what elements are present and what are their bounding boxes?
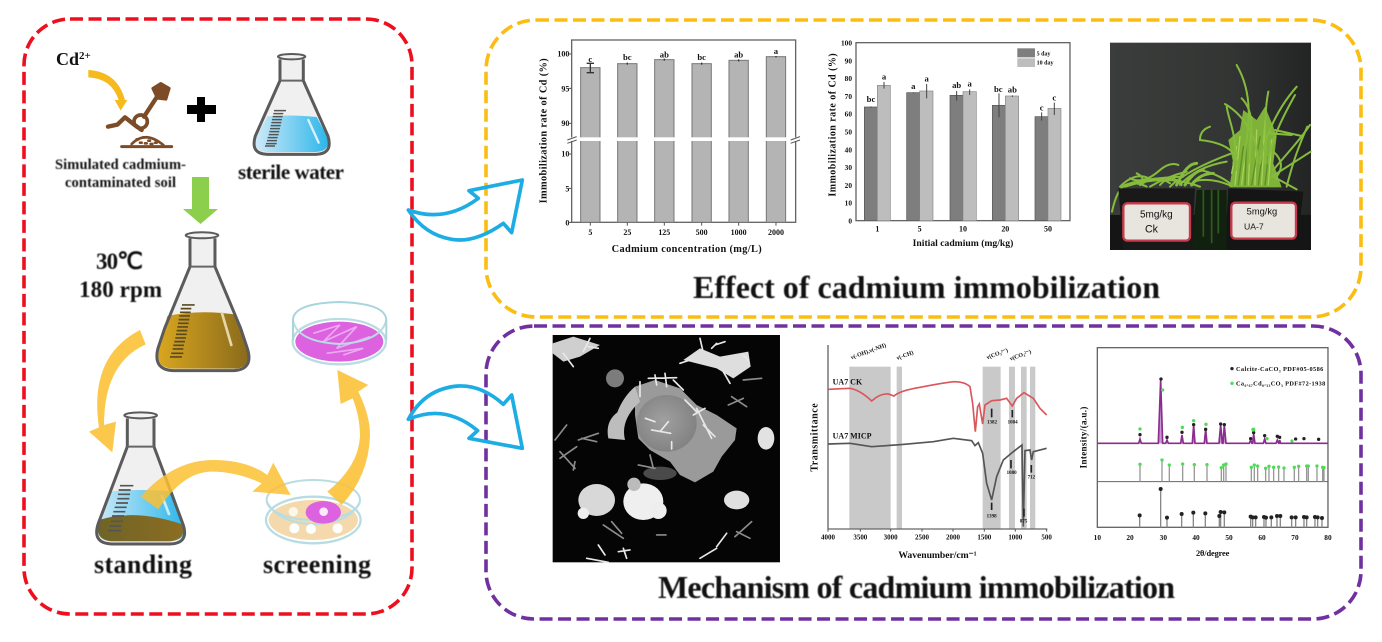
panel: effect of cadmium immobilization (486, 20, 1361, 317)
bar chart: immobilization vs cadmium concentration: 95 (561, 84, 569, 93)
bar chart: immobilization vs initial cadmium: 80 (845, 74, 852, 83)
bar chart: immobilization vs cadmium concentration: 1000 (731, 228, 747, 237)
bar chart: immobilization vs cadmium concentration: a (774, 46, 779, 56)
chart: XRD patterns: 10 (1094, 533, 1101, 542)
bar chart: immobilization vs initial cadmium: 70 (845, 92, 852, 101)
label: Cd2+: 2+ (79, 50, 91, 62)
bar chart: immobilization vs initial cadmium: 90 (845, 56, 852, 65)
photo: wheat seedlings in two pots: UA-7 (1244, 221, 1264, 231)
chart: FTIR spectra: 3500 (853, 533, 868, 541)
icon: culture flask gold (157, 232, 249, 371)
bar chart: immobilization vs initial cadmium: bc (867, 94, 875, 104)
chart: FTIR spectra: 712 (1028, 475, 1036, 480)
chart: XRD patterns: 50 (1225, 533, 1233, 542)
icon: magenta streak dish (293, 302, 386, 364)
icon: plus (187, 97, 216, 122)
bar chart: immobilization vs initial cadmium: bc (994, 84, 1003, 94)
chart: XRD patterns: 30 (1160, 533, 1167, 542)
bar chart: immobilization vs initial cadmium: 5 (918, 225, 922, 234)
bar chart: immobilization vs cadmium concentration: 0 (565, 218, 569, 227)
bar chart: immobilization vs cadmium concentration: 25 (623, 228, 631, 237)
bar chart: immobilization vs initial cadmium: a (967, 79, 972, 89)
chart: XRD patterns: 80 (1324, 533, 1332, 542)
label: screening: screening (263, 550, 371, 579)
label: conditions: 180 rpm (79, 277, 162, 302)
bar chart: immobilization vs cadmium concentration (538, 40, 800, 255)
chart: XRD patterns: 2θ/degree (1196, 549, 1230, 558)
chart: FTIR spectra: 1080 (1007, 471, 1017, 476)
bar chart: immobilization vs initial cadmium: ab (952, 80, 961, 90)
label: Cd2+: Cd (56, 49, 79, 69)
chart: FTIR spectra: ν(CO₃²⁻) (1008, 348, 1032, 363)
chart: FTIR spectra: 2500 (915, 533, 929, 541)
arrow: workflow to mechanism (408, 386, 522, 448)
photo: SEM micrograph (553, 335, 780, 562)
title: mechanism: Mechanism of cadmium immobilization (658, 569, 1175, 605)
bar chart: immobilization vs initial cadmium: 20 (845, 181, 852, 190)
chart: FTIR spectra: Transmittance (809, 403, 820, 472)
arrow: screening to plate (327, 370, 370, 505)
chart: XRD patterns (1078, 348, 1332, 558)
chart: FTIR spectra: 2000 (946, 533, 960, 541)
chart: FTIR spectra: 1398 (987, 514, 997, 519)
icon: screening dish (266, 480, 361, 543)
chart: FTIR spectra: UA7 MICP (833, 431, 872, 440)
bar chart: immobilization vs initial cadmium: ab (1008, 84, 1017, 94)
title: effect: Effect of cadmium immobilization (693, 269, 1160, 305)
label: standing: standing (94, 550, 192, 579)
bar chart: immobilization vs cadmium concentration: ab (660, 49, 669, 59)
icon: green down arrow (183, 177, 218, 224)
bar chart: immobilization vs initial cadmium: 60 (845, 110, 852, 119)
chart: FTIR spectra: 3000 (884, 533, 898, 541)
bar chart: immobilization vs cadmium concentration: bc (697, 52, 706, 62)
chart: FTIR spectra: Wavenumber/cm⁻¹ (898, 550, 977, 561)
chart: XRD patterns: Ca₀.₆₇Cd₀.₃₃CO₃ PDF#72-1938 (1236, 380, 1325, 387)
chart: FTIR spectra: ν(-CH) (895, 349, 915, 362)
bar chart: immobilization vs cadmium concentration: 90 (561, 119, 569, 128)
bar chart: immobilization vs cadmium concentration: 125 (658, 228, 670, 237)
chart: FTIR spectra: 1382 (987, 420, 997, 425)
chart: FTIR spectra: 500 (1041, 533, 1052, 541)
bar chart: immobilization vs initial cadmium: 100 (841, 38, 852, 47)
bar chart: immobilization vs initial cadmium: 50 (1044, 225, 1052, 234)
bar chart: immobilization vs cadmium concentration: Immobilization rate of Cd (%) (538, 58, 549, 203)
chart: XRD patterns: Intensity/(a.u.) (1078, 407, 1088, 468)
arrow: standing to screening (141, 460, 291, 509)
label: sterile water: sterile water (238, 160, 344, 184)
chart: FTIR spectra: 1500 (977, 533, 992, 541)
bar chart: immobilization vs initial cadmium: 10 (845, 199, 852, 208)
arrow: workflow to effect (408, 180, 522, 240)
bar chart: immobilization vs cadmium concentration: 10 (561, 150, 569, 159)
chart: FTIR spectra: UA7 CK (833, 378, 863, 387)
bar chart: immobilization vs initial cadmium: 30 (845, 163, 852, 172)
bar chart: immobilization vs cadmium concentration: 2000 (768, 228, 784, 237)
bar chart: immobilization vs initial cadmium: a (924, 74, 929, 84)
icon: sterile water flask (254, 54, 329, 154)
label: simulated soil: Simulated cadmium- (55, 157, 186, 173)
bar chart: immobilization vs cadmium concentration: c (588, 54, 592, 64)
bar chart: immobilization vs initial cadmium: 10 (959, 225, 967, 234)
bar chart: immobilization vs cadmium concentration: bc (623, 52, 632, 62)
label: conditions (79, 249, 162, 302)
chart: FTIR spectra: 875 (1020, 520, 1028, 525)
icon: soil and shovel (108, 83, 172, 147)
label: simulated soil: contaminated soil (65, 175, 176, 191)
chart: XRD patterns: 20 (1126, 533, 1134, 542)
chart: XRD patterns: 70 (1291, 533, 1299, 542)
bar chart: immobilization vs initial cadmium: 50 (845, 128, 852, 137)
chart: FTIR spectra (809, 342, 1052, 561)
bar chart: immobilization vs cadmium concentration: 5 (588, 228, 592, 237)
bar chart: immobilization vs initial cadmium: Immobilization rate of Cd (%) (827, 53, 838, 197)
chart: XRD patterns: Calcite-CaCO₃ PDF#05-0586 (1236, 366, 1323, 373)
bar chart: immobilization vs initial cadmium: c (1040, 102, 1044, 112)
bar chart: immobilization vs cadmium concentration: ab (734, 49, 743, 59)
icon: yellow curved arrow into soil (88, 70, 127, 111)
bar chart: immobilization vs initial cadmium: 5 day (1037, 51, 1050, 57)
chart: FTIR spectra: 1084 (1008, 420, 1018, 425)
chart: XRD patterns: 40 (1192, 533, 1200, 542)
bar chart: immobilization vs initial cadmium (827, 38, 1070, 249)
bar chart: immobilization vs initial cadmium: c (1052, 92, 1056, 102)
bar chart: immobilization vs cadmium concentration: Cadmium concentration (mg/L) (612, 244, 762, 255)
icon: standing flask (96, 412, 185, 544)
bar chart: immobilization vs initial cadmium: Initial cadmium (mg/kg) (913, 238, 1013, 249)
photo: wheat seedlings in two pots: 5mg/kg (1247, 206, 1277, 216)
label: simulated soil (55, 157, 186, 191)
photo: wheat seedlings in two pots: Ck (1145, 224, 1159, 236)
bar chart: immobilization vs initial cadmium: 20 (1001, 225, 1009, 234)
panel: mechanism of cadmium immobilization (486, 326, 1361, 619)
bar chart: immobilization vs cadmium concentration: 500 (696, 228, 708, 237)
bar chart: immobilization vs initial cadmium: 40 (845, 145, 852, 154)
chart: FTIR spectra: ν(-OH),ν(-NH) (849, 342, 887, 362)
chart: FTIR spectra: ν(CO₃²⁻) (985, 347, 1009, 362)
bar chart: immobilization vs cadmium concentration: 100 (557, 50, 569, 59)
chart: FTIR spectra: 4000 (821, 533, 835, 541)
bar chart: immobilization vs initial cadmium: 0 (848, 216, 852, 225)
arrow: flask to standing (89, 330, 146, 452)
photo: wheat seedlings in two pots: 5mg/kg (1140, 209, 1173, 220)
panel: experimental workflow (24, 19, 412, 614)
photo: wheat seedlings in two pots (1110, 43, 1311, 250)
chart: FTIR spectra: 1000 (1008, 533, 1023, 541)
label: conditions: 30℃ (96, 249, 143, 274)
bar chart: immobilization vs cadmium concentration: 5 (565, 184, 569, 193)
bar chart: immobilization vs initial cadmium: 1 (875, 225, 879, 234)
bar chart: immobilization vs initial cadmium: a (911, 81, 916, 91)
chart: XRD patterns: 60 (1258, 533, 1266, 542)
bar chart: immobilization vs initial cadmium: 10 day (1037, 61, 1053, 67)
bar chart: immobilization vs initial cadmium: a (882, 71, 887, 81)
